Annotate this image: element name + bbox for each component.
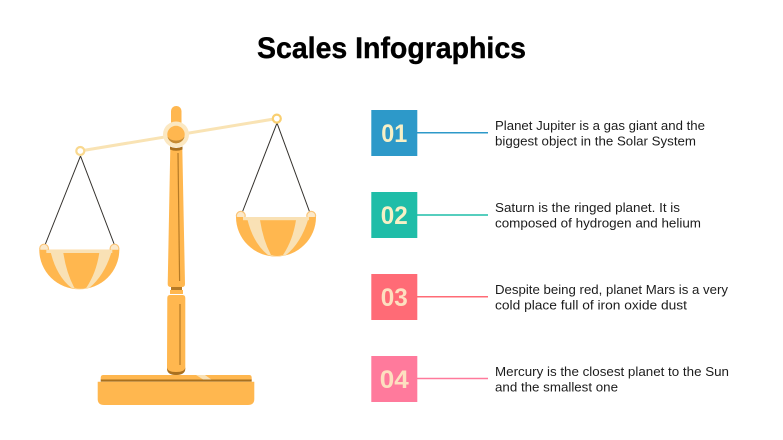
text 01: biggest object in the Solar System [495, 134, 696, 148]
text 03 [495, 282, 729, 312]
base [98, 375, 254, 405]
number box 01 [371, 110, 417, 156]
text 03: Despite being red, planet Mars is a very [495, 282, 729, 297]
number box 04 [371, 356, 417, 402]
item 02 [371, 192, 701, 238]
item 01 [371, 110, 705, 156]
text 04: and the smallest one [495, 379, 618, 394]
text 04: Mercury is the closest planet to the Sun [495, 364, 729, 379]
text 01 [495, 118, 705, 148]
number box 02 [371, 192, 417, 238]
text 02 [495, 200, 701, 230]
column [167, 106, 185, 375]
item 03 [371, 274, 729, 320]
connector 03 [417, 296, 488, 298]
number box 04: 04 [380, 366, 409, 394]
left strings [45, 156, 114, 245]
left pan [39, 244, 119, 289]
text 02: Saturn is the ringed planet. It is [495, 200, 681, 215]
connector 04 [417, 378, 488, 380]
right strings [242, 123, 310, 213]
number box 01: 01 [381, 120, 407, 148]
title: Scales Infographics [257, 32, 526, 65]
number box 03: 03 [381, 284, 408, 312]
number box 03 [371, 274, 417, 320]
text 01: Planet Jupiter is a gas giant and the [495, 118, 705, 133]
balance beam [76, 115, 281, 155]
text 02: composed of hydrogen and helium [495, 216, 701, 230]
text 04 [495, 364, 729, 394]
connector 02 [417, 214, 488, 216]
scales illustration [39, 106, 316, 405]
item 04 [371, 356, 729, 402]
right pan [236, 211, 316, 256]
connector 01 [417, 132, 488, 134]
text 03: cold place full of iron oxide dust [495, 298, 687, 312]
number box 02: 02 [381, 202, 408, 230]
pivot [163, 122, 189, 148]
